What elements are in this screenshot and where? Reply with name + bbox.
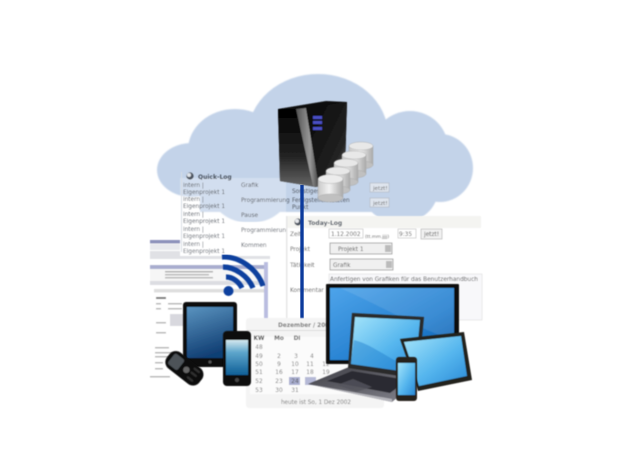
today log form: jetzt!	[423, 232, 439, 238]
cloud	[157, 74, 473, 223]
quick log rows: Grafik	[241, 183, 259, 189]
quick log rows: intern |	[183, 212, 204, 218]
device: laptop	[308, 313, 424, 402]
calendar footer: heute ist So, 1 Dez 2002	[281, 400, 351, 406]
calendar grid: 50	[255, 362, 263, 368]
calendar heading: Dezember / 2002	[278, 323, 333, 329]
today log form: Tätigkeit	[289, 263, 315, 269]
today log form: 1.12.2002	[331, 232, 361, 238]
calendar grid: 30	[275, 388, 283, 394]
today log heading: Today-Log	[308, 220, 342, 227]
today log form	[289, 229, 482, 320]
today log form: (tt.mm.jjjj)	[365, 234, 389, 240]
today log form: Grafik	[333, 263, 351, 269]
icon: storage cylinders	[318, 142, 373, 202]
panel: left screenshot	[150, 240, 270, 378]
device: right tablet	[400, 332, 472, 391]
calendar grid: 52	[255, 379, 263, 385]
calendar grid: 4	[310, 354, 314, 360]
calendar grid: 49	[255, 354, 263, 360]
calendar grid: 53	[255, 388, 263, 394]
quick log rows: Sonstiges	[292, 189, 320, 195]
calendar grid: 23	[275, 379, 283, 385]
quick log rows: intern |	[183, 183, 204, 189]
calendar grid: 10	[291, 362, 299, 368]
quick log rows: Kommen	[241, 243, 267, 249]
quick log rows: Eigenprojekt 1	[183, 234, 225, 240]
calendar grid: 24	[291, 379, 299, 385]
calendar grid: 51	[255, 370, 263, 376]
calendar grid: 2	[277, 354, 281, 360]
quick log rows: Programmierung	[241, 198, 290, 204]
quick log rows: Punkt	[292, 205, 309, 211]
quick log rows: intern |	[183, 197, 204, 203]
calendar grid: KW	[254, 336, 265, 342]
connection line	[302, 185, 327, 337]
calendar grid: 18	[306, 370, 314, 376]
today log form: Kommentar	[290, 288, 324, 294]
quick log rows: Pause	[241, 213, 258, 219]
panel: quick log	[180, 172, 389, 256]
calendar grid	[254, 336, 330, 394]
calendar grid: 11	[306, 362, 314, 368]
calendar grid: 19	[322, 370, 330, 376]
device: small phone	[396, 357, 417, 401]
calendar grid: 12	[322, 362, 330, 368]
quick log rows: Eigenprojekt 1	[183, 219, 225, 225]
quick log rows: Eigenprojekt 1	[183, 204, 225, 210]
jetzt buttons: jetzt!	[372, 201, 388, 207]
icon: server	[278, 101, 347, 187]
calendar grid: 3	[294, 354, 298, 360]
device: tablet	[183, 302, 237, 367]
quick log heading: Quick-Log	[198, 174, 232, 181]
quick log rows: Programmierung	[241, 228, 290, 234]
calendar grid: 48	[255, 345, 263, 351]
panel: calendar	[246, 318, 384, 408]
device: monitor	[326, 284, 459, 364]
quick log rows	[183, 183, 350, 255]
panel: today log	[286, 216, 482, 322]
icon: today log globe	[294, 218, 302, 226]
today log form: Zeit	[290, 232, 302, 238]
quick log rows: intern |	[183, 227, 204, 233]
server lights	[313, 116, 322, 130]
icon: wifi	[222, 257, 263, 296]
jetzt buttons: jetzt!	[372, 186, 388, 192]
device: smartphone	[223, 331, 251, 386]
calendar grid: 9	[277, 362, 281, 368]
quick log rows: Eigenprojekt 1	[183, 249, 225, 255]
today log form: 9:35	[399, 232, 412, 238]
device: feature phone	[162, 348, 207, 389]
calendar grid: 17	[291, 370, 299, 376]
today log form: Projekt 1	[338, 247, 364, 253]
calendar grid: 16	[275, 370, 283, 376]
jetzt buttons	[370, 183, 389, 207]
quick log rows: intern |	[183, 242, 204, 248]
quick log rows: Fertigstellen letzten	[292, 198, 350, 204]
today log form: Anfertigen von Grafiken für das Benutzerhandbuch	[330, 277, 478, 283]
icon: quick log globe	[186, 172, 194, 180]
calendar grid: Mo	[274, 336, 284, 342]
today log form: Projekt	[290, 247, 311, 253]
calendar grid: 31	[291, 388, 299, 394]
calendar grid: Di	[294, 336, 300, 342]
quick log rows: Eigenprojekt 1	[183, 190, 225, 196]
